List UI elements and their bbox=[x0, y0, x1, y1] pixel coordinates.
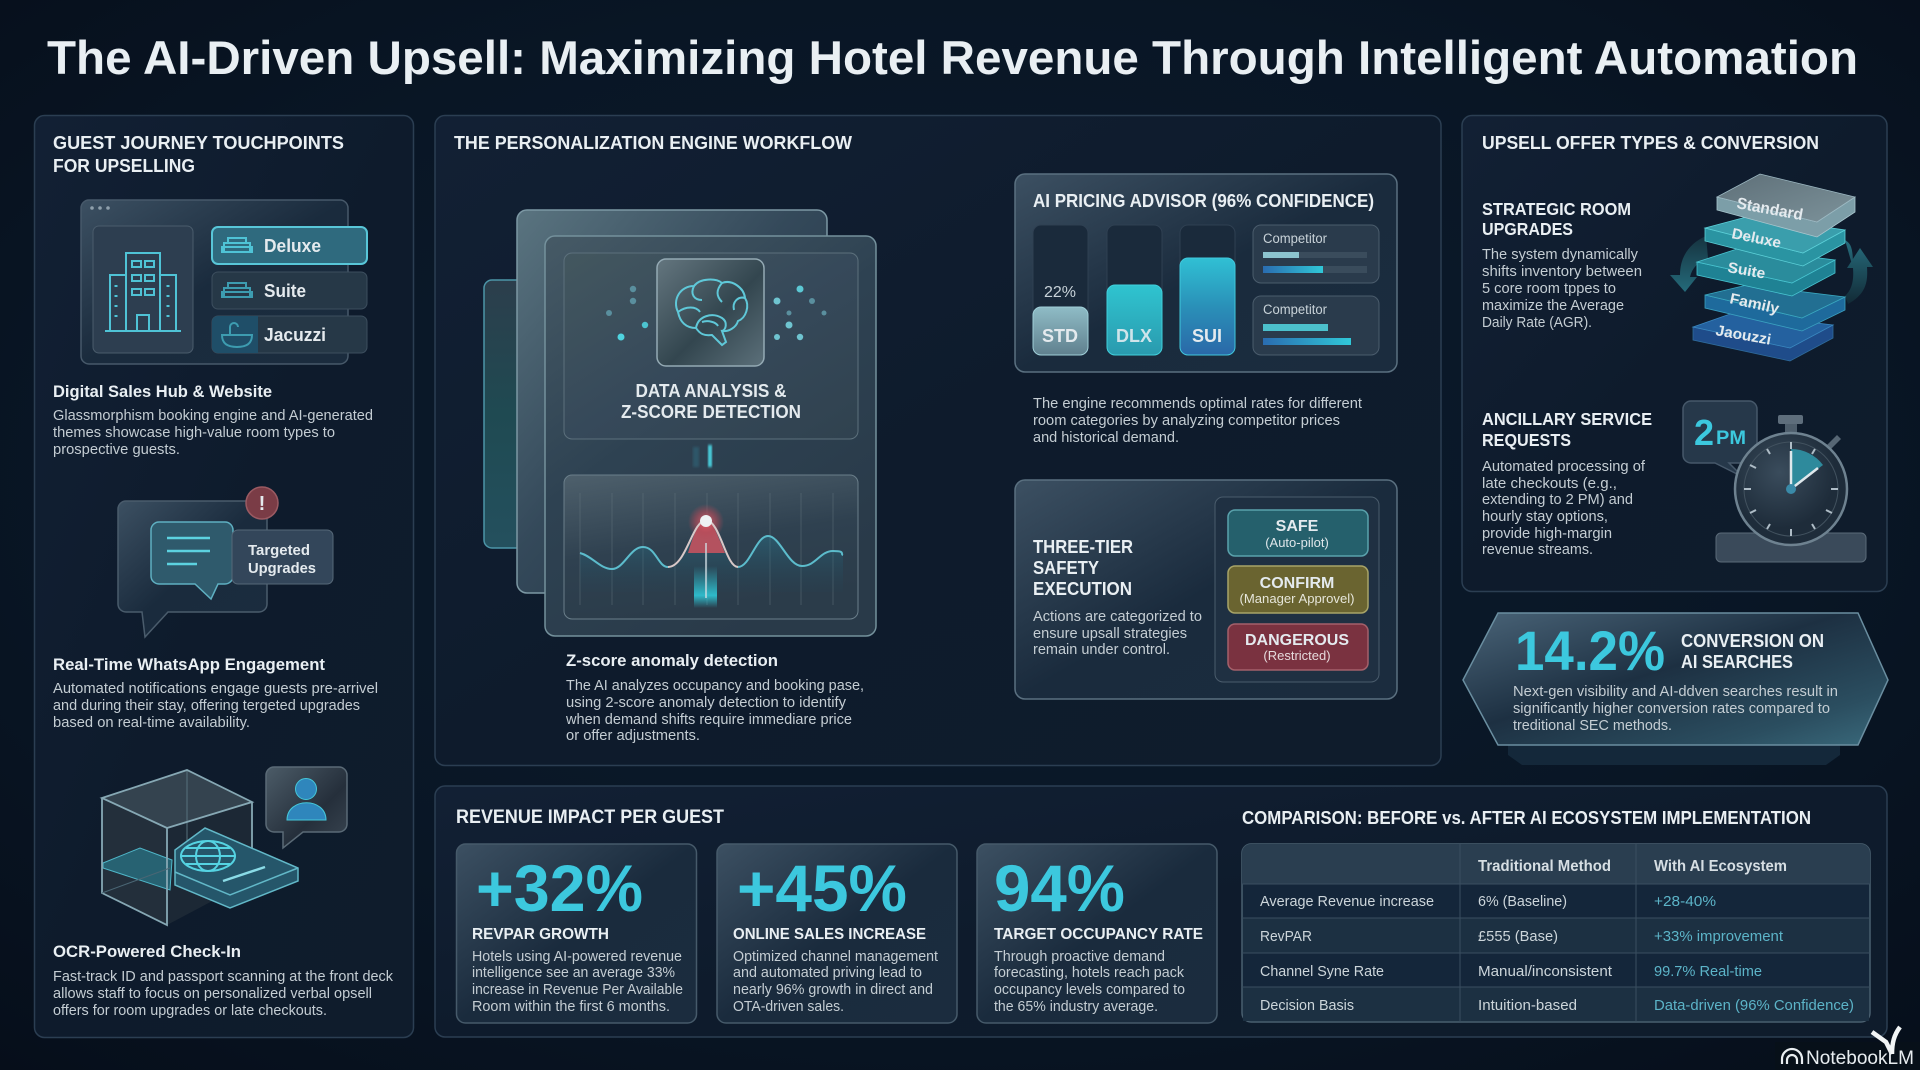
row: decision basis bbox=[1260, 997, 1854, 1014]
text block: digital sales hub: Digital Sales Hub & Website bbox=[53, 383, 272, 401]
bar: SUI: SUI bbox=[1192, 326, 1222, 346]
layer: Deluxe bbox=[1705, 216, 1845, 266]
layer: Family: Family bbox=[1728, 290, 1781, 318]
bar: SUI bbox=[1180, 225, 1235, 355]
stat card: RevPAR growth: Hotels using AI-powered revenue bbox=[472, 949, 682, 965]
layer: Jacuzzi bbox=[1693, 313, 1833, 361]
card: AI pricing advisor bbox=[1015, 174, 1397, 372]
stat card: online sales increase: ONLINE SALES INCREASE bbox=[733, 926, 926, 943]
text block: OCR check-in: Fast-track ID and passport scanning at the front deck bbox=[53, 969, 394, 985]
text block: WhatsApp engagement: and during their stay, offering tergeted upgrades bbox=[53, 698, 360, 714]
text block: digital sales hub: prospective guests. bbox=[53, 442, 180, 458]
bar: DLX: DLX bbox=[1116, 326, 1152, 346]
text block: safety description: remain under control. bbox=[1033, 642, 1170, 658]
row: channel sync rate: Channel Syne Rate bbox=[1260, 963, 1384, 980]
text block: z-score anomaly detection bbox=[565, 652, 864, 744]
tier: dangerous: (Restricted) bbox=[1263, 648, 1331, 663]
stat card: target occupancy rate: Through proactive demand bbox=[994, 949, 1165, 965]
row: average revenue increase: Average Revenue increase bbox=[1260, 893, 1434, 910]
text block: z-score anomaly detection: using 2-score anomaly detection to identify bbox=[566, 695, 847, 711]
text block: z-score anomaly detection: when demand shifts require immediare price bbox=[565, 712, 852, 728]
stat card: target occupancy rate: forecasting, hotels reach pack bbox=[994, 965, 1185, 981]
label: targeted upgrades: Upgrades bbox=[248, 560, 316, 577]
layer: Jacuzzi: Jaouzzi bbox=[1714, 322, 1772, 349]
label: targeted upgrades: Targeted bbox=[248, 542, 310, 559]
text block: strategic room upgrades: STRATEGIC ROOM bbox=[1482, 199, 1631, 219]
icon: hotel building bbox=[105, 253, 181, 331]
text block: WhatsApp engagement: Automated notifications engage guests pre-arrivel bbox=[53, 681, 378, 697]
stat card: online sales increase: nearly 96% growth in direct and bbox=[733, 982, 933, 998]
stat card: RevPAR growth: Room within the first 6 months. bbox=[472, 999, 670, 1015]
illustration: passport scanner bbox=[102, 770, 298, 925]
option: Jacuzzi bbox=[212, 316, 367, 353]
bar: STD bbox=[1033, 225, 1088, 355]
option: Deluxe bbox=[212, 227, 367, 264]
icon: alert badge bbox=[246, 487, 278, 519]
text block: ancillary service requests: late checkouts (e.g., bbox=[1482, 476, 1617, 492]
text block: WhatsApp engagement bbox=[53, 656, 378, 731]
text block: strategic room upgrades: UPGRADES bbox=[1482, 219, 1573, 239]
table header bbox=[1478, 858, 1787, 875]
text block: strategic room upgrades: Daily Rate (AGR). bbox=[1482, 315, 1592, 331]
table header: Traditional Method bbox=[1478, 858, 1611, 875]
arrows: rotation around stack bbox=[1670, 236, 1873, 304]
text block: ancillary service requests: REQUESTS bbox=[1482, 430, 1571, 450]
stat card: target occupancy rate bbox=[977, 844, 1217, 1023]
stat card: RevPAR growth bbox=[456, 844, 696, 1023]
option: Jacuzzi: Jacuzzi bbox=[264, 325, 326, 345]
card: three-tier safety execution bbox=[1015, 480, 1397, 699]
row: channel sync rate: Manual/inconsistent bbox=[1478, 963, 1613, 980]
stat card: online sales increase: and automated priving lead to bbox=[733, 965, 922, 981]
stat card: target occupancy rate: occupancy levels compared to bbox=[994, 982, 1185, 998]
watermark: NotebookLM: NotebookLM bbox=[1806, 1048, 1914, 1069]
tier: dangerous: DANGEROUS bbox=[1245, 632, 1349, 649]
row: average revenue increase: +28-40% bbox=[1654, 893, 1716, 910]
tier: safe: (Auto-pilot) bbox=[1265, 535, 1329, 550]
callout: 14.2% conversion on AI searches: treditional SEC methods. bbox=[1513, 718, 1672, 734]
text block: ancillary service requests bbox=[1482, 409, 1652, 558]
text block: pricing explanation: room categories by analyzing competitor prices bbox=[1033, 413, 1340, 429]
layer: Family bbox=[1705, 285, 1845, 331]
stat card: online sales increase: OTA-driven sales. bbox=[733, 999, 844, 1015]
stat card: online sales increase: Optimized channel management bbox=[733, 949, 938, 965]
tier: dangerous bbox=[1228, 624, 1368, 670]
competitor card 2 bbox=[1253, 296, 1379, 355]
heading: guest journey touchpoints: FOR UPSELLING bbox=[53, 155, 195, 176]
competitor card 2: Competitor bbox=[1263, 302, 1327, 317]
stat card: target occupancy rate: the 65% industry average. bbox=[994, 999, 1158, 1015]
layer: Deluxe: Deluxe bbox=[1730, 225, 1783, 252]
stat card: target occupancy rate: TARGET OCCUPANCY RATE bbox=[994, 926, 1203, 943]
text block: strategic room upgrades: The system dynamically bbox=[1482, 247, 1639, 263]
tier: confirm bbox=[1228, 566, 1368, 613]
text block: OCR check-in: OCR-Powered Check-In bbox=[53, 943, 241, 961]
icon: brain bbox=[657, 259, 764, 366]
label: data analysis: DATA ANALYSIS & bbox=[636, 381, 787, 401]
text block: ancillary service requests: extending to 2 PM) and bbox=[1482, 492, 1633, 508]
bar: STD: 22% bbox=[1044, 284, 1076, 301]
heading: revenue impact: REVENUE IMPACT PER GUEST bbox=[456, 807, 724, 828]
text block: ancillary service requests: revenue streams. bbox=[1482, 542, 1593, 558]
tier: safe bbox=[1228, 510, 1368, 556]
panel: personalization engine workflow bbox=[435, 116, 1441, 766]
text block: digital sales hub: Glassmorphism booking engine and AI-generated bbox=[53, 408, 373, 424]
text block: WhatsApp engagement: based on real-time availability. bbox=[53, 715, 250, 731]
illustration: late checkout stopwatch bbox=[1683, 401, 1866, 562]
icon: globe bbox=[181, 841, 235, 871]
decorative data dots bbox=[606, 286, 826, 340]
row: RevPAR bbox=[1260, 928, 1784, 945]
competitor card 1 bbox=[1253, 225, 1379, 283]
text block: pricing explanation: The engine recommends optimal rates for different bbox=[1033, 396, 1362, 412]
callout: 2 PM bbox=[1683, 401, 1757, 477]
callout: 14.2% conversion on AI searches bbox=[1463, 613, 1888, 765]
layer: Suite: Suite bbox=[1726, 259, 1767, 283]
text block: ancillary service requests: Automated processing of bbox=[1482, 459, 1646, 475]
competitor card 1: Competitor bbox=[1263, 231, 1327, 246]
stat card: target occupancy rate: 94% bbox=[994, 851, 1125, 925]
text block: z-score anomaly detection: Z-score anomaly detection bbox=[566, 652, 778, 670]
illustration: room tier stack bbox=[1670, 174, 1873, 361]
bar: STD: STD bbox=[1042, 326, 1078, 346]
chart: z-score anomaly wave bbox=[564, 475, 858, 619]
icon: guest profile bubble bbox=[266, 767, 347, 848]
text block: strategic room upgrades: maximize the Average bbox=[1482, 298, 1624, 314]
tier: confirm: CONFIRM bbox=[1260, 575, 1334, 592]
text block: digital sales hub: themes showcase high-value room types to bbox=[53, 425, 335, 441]
diagram: layered glass data analysis cards bbox=[484, 210, 876, 636]
callout: 2 PM: PM bbox=[1716, 428, 1746, 449]
stat card: online sales increase: +45% bbox=[737, 851, 907, 925]
stat card: RevPAR growth: intelligence see an average 33% bbox=[472, 965, 675, 981]
text block: ancillary service requests: provide high-margin bbox=[1482, 526, 1612, 542]
panel: guest journey touchpoints bbox=[34, 116, 414, 1038]
row: channel sync rate bbox=[1260, 963, 1762, 980]
arrow: data flow glow bbox=[693, 445, 712, 467]
label: data analysis: Z-SCORE DETECTION bbox=[621, 402, 801, 422]
table header: With AI Ecosystem bbox=[1654, 858, 1787, 875]
heading: pricing advisor: AI PRICING ADVISOR (96% CONFIDENCE) bbox=[1033, 190, 1374, 211]
row: decision basis: Intuition-based bbox=[1478, 997, 1577, 1014]
text block: ancillary service requests: ANCILLARY SERVICE bbox=[1482, 409, 1652, 429]
tier: safe: SAFE bbox=[1276, 518, 1319, 535]
stat card: online sales increase bbox=[717, 844, 957, 1023]
bar: DLX bbox=[1107, 225, 1162, 355]
heading: safety execution: THREE-TIER bbox=[1033, 537, 1133, 557]
text block: pricing explanation: and historical demand. bbox=[1033, 430, 1179, 446]
label: targeted upgrades bbox=[232, 530, 333, 584]
callout: 14.2% conversion on AI searches: 14.2% bbox=[1515, 619, 1665, 682]
heading: comparison: COMPARISON: BEFORE vs. AFTER AI ECOSYSTEM IMPLEMENTATION bbox=[1242, 807, 1811, 828]
heading: personalization engine: THE PERSONALIZATION ENGINE WORKFLOW bbox=[454, 132, 853, 153]
panel: upsell offer types and conversion bbox=[1462, 116, 1887, 592]
heading: upsell offer types: UPSELL OFFER TYPES & CONVERSION bbox=[1482, 132, 1819, 153]
layer: Suite bbox=[1697, 248, 1835, 296]
row: RevPAR: +33% improvement bbox=[1654, 928, 1784, 945]
text block: OCR check-in: offers for room upgrades or late checkouts. bbox=[53, 1003, 327, 1019]
text block: strategic room upgrades bbox=[1482, 199, 1642, 331]
stat card: RevPAR growth: +32% bbox=[476, 851, 643, 925]
text block: WhatsApp engagement: Real-Time WhatsApp Engagement bbox=[53, 656, 326, 674]
illustration: WhatsApp chat bubbles bbox=[118, 487, 333, 637]
card: data analysis and z-score detection bbox=[564, 253, 858, 439]
callout: 14.2% conversion on AI searches: significantly higher conversion rates compared to bbox=[1513, 701, 1830, 717]
callout: 14.2% conversion on AI searches: AI SEARCHES bbox=[1681, 652, 1793, 672]
text block: z-score anomaly detection: or offer adjustments. bbox=[566, 728, 700, 744]
row: decision basis: Decision Basis bbox=[1260, 997, 1354, 1014]
stat card: RevPAR growth: increase in Revenue Per Available bbox=[472, 982, 683, 998]
text block: ancillary service requests: hourly stay options, bbox=[1482, 509, 1608, 525]
callout: 14.2% conversion on AI searches: Next-gen visibility and AI-ddven searches result in bbox=[1513, 684, 1838, 700]
row: decision basis: Data-driven (96% Confidence) bbox=[1654, 997, 1854, 1014]
illustration: booking website window bbox=[81, 200, 367, 364]
text block: strategic room upgrades: 5 core room tppes to bbox=[1482, 281, 1616, 297]
row: average revenue increase bbox=[1260, 893, 1716, 910]
text block: safety description: Actions are categorized to bbox=[1033, 609, 1202, 625]
heading: guest journey touchpoints: GUEST JOURNEY TOUCHPOINTS bbox=[53, 132, 344, 153]
text block: strategic room upgrades: shifts inventory between bbox=[1482, 264, 1642, 280]
row: RevPAR: RevPAR bbox=[1260, 928, 1312, 945]
option: Suite: Suite bbox=[264, 281, 306, 301]
heading: safety execution: SAFETY bbox=[1033, 558, 1099, 578]
watermark: NotebookLM bbox=[1775, 1027, 1920, 1070]
callout: 2 PM: 2 bbox=[1694, 412, 1714, 453]
callout: 14.2% conversion on AI searches: CONVERSION ON bbox=[1681, 631, 1824, 651]
heading: safety execution: EXECUTION bbox=[1033, 579, 1132, 599]
text block: OCR check-in: allows staff to focus on personalized verbal opsell bbox=[53, 986, 372, 1002]
layer: Standard bbox=[1717, 174, 1855, 237]
table: before vs after bbox=[1242, 844, 1870, 1022]
text block: OCR check-in bbox=[53, 943, 394, 1019]
panel: revenue impact and comparison bbox=[435, 786, 1887, 1037]
stat card: RevPAR growth: REVPAR GROWTH bbox=[472, 926, 609, 943]
row: channel sync rate: 99.7% Real-time bbox=[1654, 963, 1762, 980]
title: The AI-Driven Upsell: Maximizing Hotel Revenue Through Intelligent Automation bbox=[47, 32, 1858, 85]
tier: confirm: (Manager Approvel) bbox=[1240, 591, 1354, 606]
icon: alert badge: ! bbox=[259, 493, 265, 515]
text block: z-score anomaly detection: The AI analyzes occupancy and booking pase, bbox=[566, 678, 864, 694]
row: RevPAR: £555 (Base) bbox=[1478, 928, 1558, 945]
layer: Standard: Standard bbox=[1735, 195, 1804, 224]
text block: digital sales hub bbox=[53, 383, 373, 458]
text block: safety description: ensure upsall strategies bbox=[1033, 626, 1187, 642]
row: average revenue increase: 6% (Baseline) bbox=[1478, 893, 1567, 910]
option: Deluxe: Deluxe bbox=[264, 236, 321, 256]
option: Suite bbox=[212, 272, 367, 309]
